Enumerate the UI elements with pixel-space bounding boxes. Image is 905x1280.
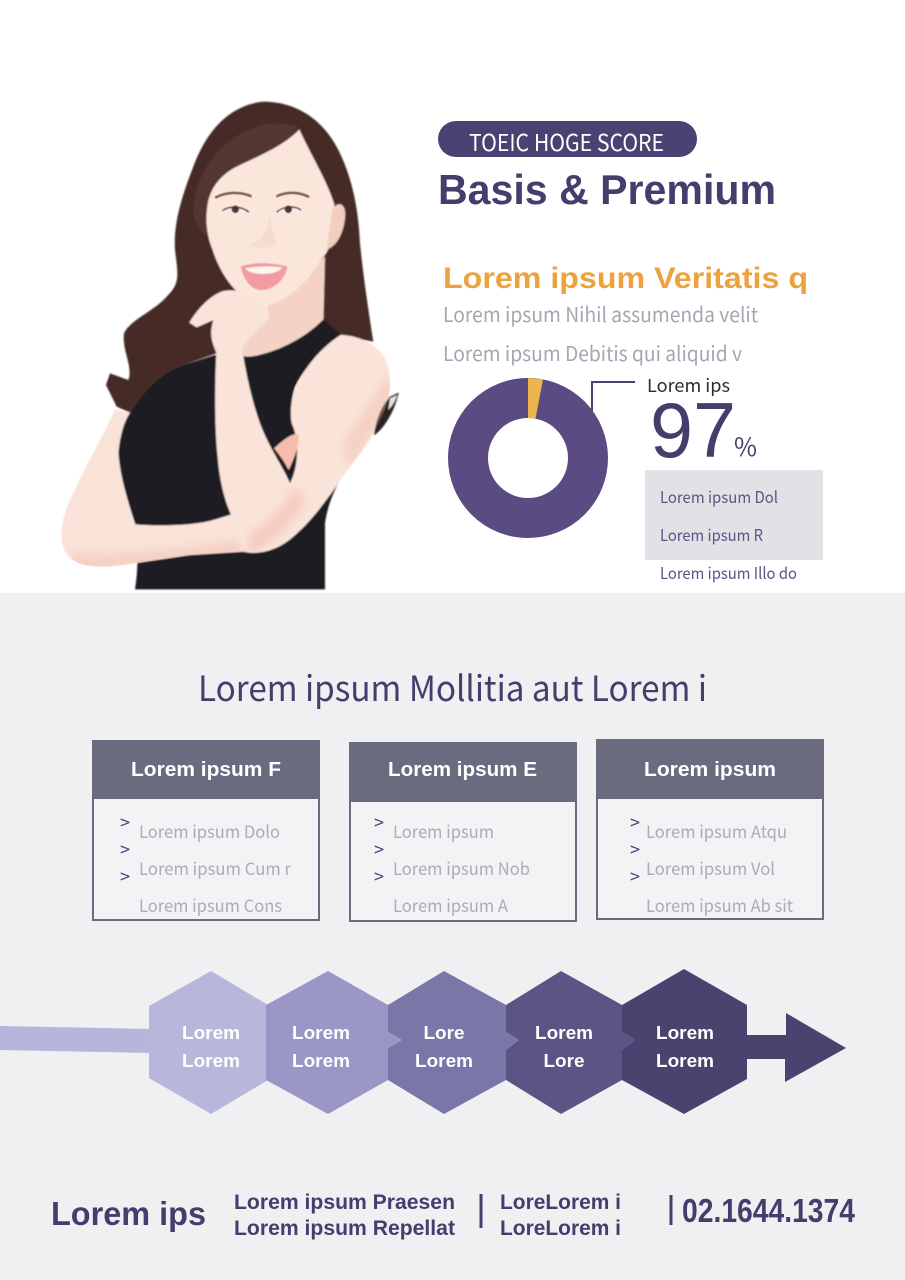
step 3 [388, 971, 519, 1114]
left arm [61, 409, 243, 567]
donut chart 97% [468, 378, 588, 518]
card 1: Lorem ipsum Cons [139, 892, 282, 917]
step 5: Lorem [656, 1051, 714, 1071]
footer: divider [480, 1194, 482, 1228]
hexagon steps [149, 969, 747, 1114]
card 1: Lorem ipsum Dolo [139, 818, 280, 843]
step 3: Lorem [415, 1051, 473, 1071]
card 2 [349, 742, 577, 921]
grey list box: Lorem ipsum Illo do [660, 560, 797, 584]
watch strap behind arm [374, 393, 399, 435]
card 1: Lorem ipsum F [131, 759, 281, 781]
card 1: > [120, 809, 130, 835]
mouth [241, 263, 287, 290]
grey description lines [443, 298, 758, 367]
card 2: Lorem ipsum E [388, 759, 537, 781]
donut label: Lorem ips [647, 372, 730, 398]
grey list box: Lorem ipsum Dol [660, 484, 778, 508]
card 2: > [374, 809, 384, 835]
card 3: Lorem ipsum Atqu [646, 818, 787, 843]
card 3: Lorem ipsum Vol [646, 855, 775, 880]
top section background [0, 0, 905, 593]
hair lighter sweep [193, 123, 298, 237]
nose shadow [249, 213, 277, 248]
process arrow: head [746, 1013, 846, 1082]
bottom section background [0, 593, 905, 1280]
card 3: Lorem ipsum Ab sit [646, 892, 794, 917]
orange subheading: Lorem ipsum Veritatis q [443, 262, 808, 295]
facial features [216, 193, 308, 290]
footer: second detail lines: LoreLorem i [500, 1217, 621, 1240]
step 3: Lore [424, 1023, 464, 1043]
footer: second detail lines [500, 1191, 621, 1240]
arm shading [247, 377, 397, 553]
card 2: Lorem ipsum A [393, 892, 509, 917]
grey description lines: Lorem ipsum Debitis qui aliquid v [443, 337, 742, 367]
step 4: Lore [544, 1051, 584, 1071]
card 1 [92, 740, 320, 920]
face [206, 129, 335, 305]
left arm shading [71, 540, 241, 566]
process arrow: lead-in bar [0, 1026, 150, 1053]
leader line [592, 382, 635, 411]
eyes [224, 207, 247, 213]
step 5: Lorem [656, 1023, 714, 1043]
big number 97%: % [734, 428, 757, 464]
card 2: Lorem ipsum Nob [393, 855, 530, 880]
ear [327, 204, 345, 249]
dress [118, 319, 343, 589]
footer: detail lines: Lorem ipsum Praesen [234, 1191, 455, 1214]
card 3: > [630, 863, 640, 889]
section heading: Lorem ipsum Mollitia aut Lorem i [198, 661, 707, 712]
step 1: Lorem [182, 1023, 240, 1043]
main title: Basis & Premium [438, 166, 776, 213]
hidden hand [274, 434, 299, 470]
card 1: Lorem ipsum Cum r [139, 855, 291, 880]
step 2 [266, 971, 402, 1114]
card 2: Lorem ipsum [393, 818, 494, 843]
card 1: > [120, 836, 130, 862]
score pill: TOEIC HOGE SCORE [469, 124, 664, 158]
raised arm: forearm, elbow and upper arm [215, 335, 390, 553]
footer: second detail lines: LoreLorem i [500, 1191, 621, 1214]
step 2: Lorem [292, 1023, 350, 1043]
fist under chin [189, 290, 269, 353]
card 3 [596, 739, 824, 919]
step 1 [149, 971, 268, 1114]
card 2: > [374, 863, 384, 889]
footer: name: Lorem ips [51, 1195, 206, 1232]
card 1: > [120, 863, 130, 889]
hair back [106, 102, 373, 413]
card 2: > [374, 836, 384, 862]
step 4: Lorem [535, 1023, 593, 1043]
grey list box [645, 470, 823, 584]
step 4 [506, 971, 635, 1114]
card 3: > [630, 809, 640, 835]
grey description lines: Lorem ipsum Nihil assumenda velit [443, 298, 758, 328]
footer: detail lines: Lorem ipsum Repellat [234, 1217, 455, 1240]
big number 97%: 97 [650, 386, 736, 474]
footer: detail lines [234, 1191, 455, 1240]
grey list box: Lorem ipsum R [660, 522, 763, 546]
footer: phone number: 02.1644.1374 [682, 1192, 856, 1229]
step 2: Lorem [292, 1051, 350, 1071]
card 3: Lorem ipsum [644, 759, 776, 781]
neck [233, 257, 325, 360]
step 5 [622, 969, 747, 1114]
card 3: > [630, 836, 640, 862]
portrait photo: woman in black dress [61, 102, 399, 589]
brows [216, 193, 251, 197]
step 1: Lorem [182, 1051, 240, 1071]
